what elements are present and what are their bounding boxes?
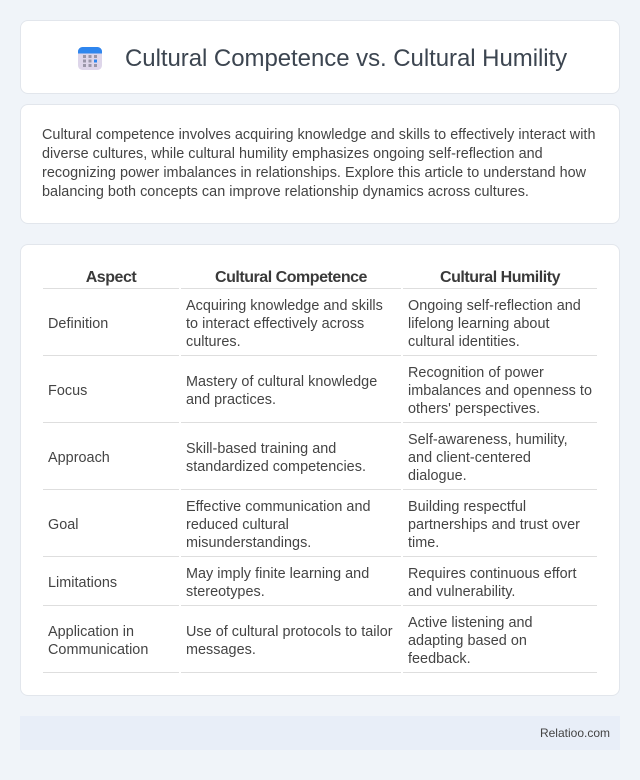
row: Definition: Ongoing self-reflection and bbox=[408, 298, 581, 314]
row: Goal: Goal bbox=[48, 517, 79, 533]
table header: Aspect bbox=[86, 269, 136, 286]
row: Focus: imbalances and openness to bbox=[408, 383, 592, 399]
row: Focus: others' perspectives. bbox=[408, 401, 540, 417]
row: Application in Communication bbox=[48, 615, 533, 667]
row: Application in Communication: messages. bbox=[186, 642, 256, 658]
title card bbox=[20, 20, 620, 94]
row: Approach: Approach bbox=[48, 450, 110, 466]
row: Application in Communication: feedback. bbox=[408, 651, 471, 667]
table header: Cultural Humility bbox=[440, 269, 560, 286]
table card bbox=[20, 244, 620, 696]
row: Limitations: May imply finite learning and bbox=[186, 566, 369, 582]
row: Goal: partnerships and trust over bbox=[408, 517, 580, 533]
row: Focus: Recognition of power bbox=[408, 365, 544, 381]
intro card bbox=[20, 104, 620, 224]
footer bbox=[20, 716, 620, 750]
row: Approach: Self-awareness, humility, bbox=[408, 432, 568, 448]
row: Limitations bbox=[48, 566, 577, 600]
row: Goal bbox=[48, 499, 580, 551]
row: Limitations: and vulnerability. bbox=[408, 584, 515, 600]
row: Focus: and practices. bbox=[186, 392, 276, 408]
row: Application in Communication: Application in bbox=[48, 624, 134, 640]
intro text: Cultural competence involves acquiring knowledge and skills to effectively interact with bbox=[42, 127, 596, 143]
row: Approach: and client-centered bbox=[408, 450, 531, 466]
row: Application in Communication: adapting based on bbox=[408, 633, 527, 649]
row: Goal: Effective communication and bbox=[186, 499, 371, 515]
row: Limitations: stereotypes. bbox=[186, 584, 265, 600]
row: Definition: lifelong learning about bbox=[408, 316, 550, 332]
row: Approach: Skill-based training and bbox=[186, 441, 336, 457]
table header: Cultural Competence bbox=[215, 269, 367, 286]
intro text: balancing both concepts can improve relationship dynamics across cultures. bbox=[42, 184, 529, 200]
intro text: recognizing power imbalances in relationships. Explore this article to understand how bbox=[42, 165, 586, 181]
row: Definition: cultural identities. bbox=[408, 334, 520, 350]
row: Definition: to interact effectively across bbox=[186, 316, 364, 332]
row: Goal: misunderstandings. bbox=[186, 535, 311, 551]
row: Definition: cultures. bbox=[186, 334, 241, 350]
row: Goal: time. bbox=[408, 535, 439, 551]
intro text bbox=[42, 127, 596, 200]
row: Focus: Mastery of cultural knowledge bbox=[186, 374, 377, 390]
row: Approach: standardized competencies. bbox=[186, 459, 366, 475]
row: Focus bbox=[48, 365, 592, 417]
row: Definition: Acquiring knowledge and skills bbox=[186, 298, 383, 314]
row: Application in Communication: Communication bbox=[48, 642, 148, 658]
row: Application in Communication: Active listening and bbox=[408, 615, 533, 631]
title: Cultural Competence vs. Cultural Humility bbox=[125, 45, 567, 72]
row: Definition bbox=[48, 298, 581, 350]
row: Limitations: Limitations bbox=[48, 575, 117, 591]
row: Approach: dialogue. bbox=[408, 468, 467, 484]
table header bbox=[86, 269, 560, 286]
footer: Relatioo.com bbox=[540, 726, 610, 740]
row: Goal: reduced cultural bbox=[186, 517, 289, 533]
row: Definition: Definition bbox=[48, 316, 108, 332]
intro text: diverse cultures, while cultural humility emphasizes ongoing self-reflection and bbox=[42, 146, 543, 162]
row: Goal: Building respectful bbox=[408, 499, 526, 515]
icon: calendar bbox=[78, 47, 102, 70]
row: Approach bbox=[48, 432, 568, 484]
row: Application in Communication: Use of cultural protocols to tailor bbox=[186, 624, 393, 640]
row: Focus: Focus bbox=[48, 383, 87, 399]
row: Limitations: Requires continuous effort bbox=[408, 566, 577, 582]
